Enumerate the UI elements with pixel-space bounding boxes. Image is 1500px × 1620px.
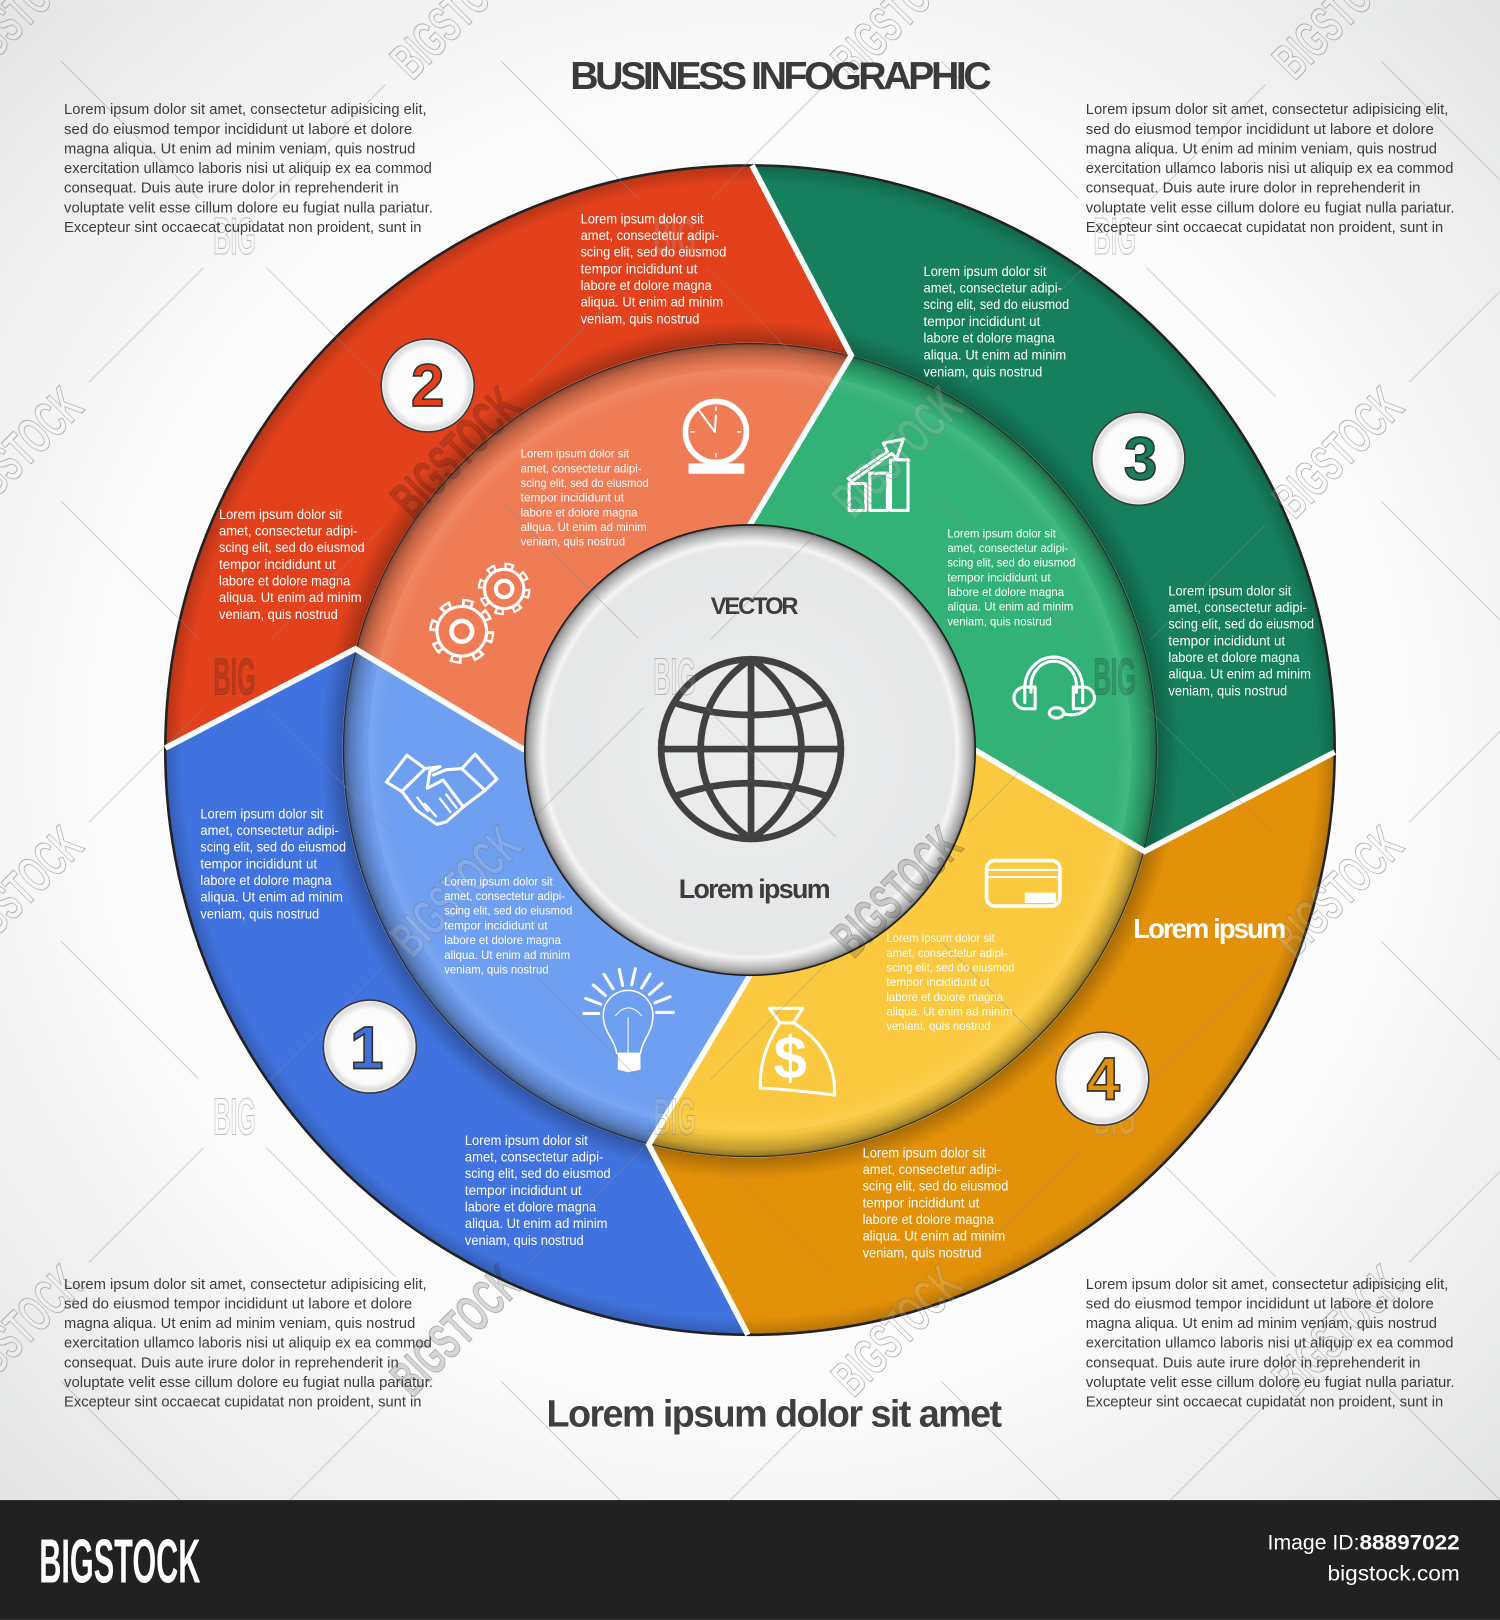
- text block: bottom right: consequat. Duis aute irure dolor in reprehenderit in: [1086, 1355, 1420, 1371]
- subtitle: Lorem ipsum dolor sit amet: [546, 1393, 1003, 1435]
- middle text: coral: veniam, quis nostrud: [521, 535, 625, 549]
- icon: money bag: [760, 1008, 835, 1095]
- badge: 3: 3: [1124, 425, 1157, 492]
- outer text: red top: aliqua. Ut enim ad minim: [581, 295, 723, 310]
- outer text: red left: labore et dolore magna: [219, 574, 351, 589]
- middle text: coral: [521, 447, 649, 549]
- centre label: Lorem ipsum: Lorem ipsum: [679, 874, 831, 904]
- icon: credit card: [987, 861, 1060, 906]
- text block: bottom right: Lorem ipsum dolor sit amet, consectetur adipisicing elit,: [1086, 1277, 1448, 1293]
- outer text: blue bottom: scing elit, sed do eiusmod: [465, 1166, 611, 1181]
- text block: bottom right: [1086, 1277, 1455, 1411]
- outer text: blue bottom: tempor incididunt ut: [465, 1183, 582, 1198]
- outer text: red top: amet, consectetur adipi-: [581, 228, 719, 243]
- middle text: blue: aliqua. Ut enim ad minim: [444, 948, 570, 962]
- white separators: [165, 165, 1335, 1335]
- middle text: yellow: [886, 931, 1014, 1033]
- watermark: BIGSTOCK: BIGSTOCK: [379, 815, 531, 967]
- text block: bottom right: sed do eiusmod tempor incididunt ut labore et dolore: [1086, 1296, 1434, 1312]
- outer text: red top: scing elit, sed do eiusmod: [581, 244, 726, 259]
- middle text: blue: tempor incididunt ut: [444, 918, 548, 932]
- outer text: red left: amet, consectetur adipi-: [219, 523, 357, 538]
- outer text: red left: scing elit, sed do eiusmod: [219, 540, 365, 555]
- outer text: orange bottom: amet, consectetur adipi-: [863, 1162, 1001, 1177]
- outer text: green right: Lorem ipsum dolor sit: [1168, 583, 1292, 598]
- text block: bottom left: Excepteur sint occaecat cupidatat non proident, sunt in: [64, 1395, 421, 1411]
- outer text: red left: tempor incididunt ut: [219, 557, 336, 572]
- watermark: BIG: BIG: [653, 207, 696, 265]
- outer segment: green: [752, 165, 1335, 851]
- outer text: red top: [581, 211, 726, 327]
- outer text: red left: [219, 507, 365, 622]
- text block: bottom right: Excepteur sint occaecat cupidatat non proident, sunt in: [1086, 1395, 1443, 1411]
- text block: bottom left: [64, 1277, 433, 1411]
- watermark: BIG: BIG: [213, 647, 256, 705]
- middle text: coral: scing elit, sed do eiusmod: [521, 476, 649, 490]
- icon: money bag: $: [774, 1025, 807, 1092]
- text block: top right: sed do eiusmod tempor incididunt ut labore et dolore: [1086, 122, 1434, 138]
- outer text: orange bottom: labore et dolore magna: [863, 1212, 994, 1227]
- middle text: green: Lorem ipsum dolor sit: [947, 526, 1056, 540]
- outer ring: [165, 165, 1335, 1335]
- outer text: blue left: tempor incididunt ut: [200, 857, 317, 872]
- middle text: blue: [444, 874, 572, 976]
- outer text: blue left: amet, consectetur adipi-: [200, 823, 339, 838]
- badge: 1: 1: [350, 1014, 383, 1081]
- title: BUSINESS INFOGRAPHIC: [570, 54, 992, 98]
- middle segment: green: [750, 355, 1157, 851]
- middle text: yellow: labore et dolore magna: [886, 990, 1003, 1004]
- outer text: green top: tempor incididunt ut: [924, 314, 1041, 329]
- outer segment: blue: [165, 649, 748, 1335]
- text block: top right: Lorem ipsum dolor sit amet, consectetur adipisicing elit,: [1086, 102, 1448, 118]
- outer text: green right: labore et dolore magna: [1168, 650, 1300, 665]
- watermark: BIGSTOCK: BIGSTOCK: [1261, 815, 1414, 967]
- watermark: BIG: BIG: [213, 1087, 256, 1145]
- text block: top left: Lorem ipsum dolor sit amet, consectetur adipisicing elit,: [64, 102, 427, 118]
- outer text: green top: [924, 264, 1069, 379]
- outer text: green top: veniam, quis nostrud: [924, 364, 1042, 379]
- middle text: yellow: aliqua. Ut enim ad minim: [886, 1005, 1012, 1019]
- text block: bottom left: consequat. Duis aute irure dolor in reprehenderit in: [64, 1355, 399, 1371]
- badge: 1: [323, 1000, 416, 1093]
- text block: top right: [1086, 102, 1455, 236]
- outer text: orange bottom: [863, 1145, 1008, 1261]
- watermark: BIGSTOCK: BIGSTOCK: [820, 1254, 972, 1406]
- middle text: yellow: tempor incididunt ut: [886, 975, 990, 989]
- middle segment: coral: [355, 343, 851, 750]
- text block: top left: voluptate velit esse cillum dolore eu fugiat nulla pariatur.: [64, 200, 433, 216]
- outer text: green top: scing elit, sed do eiusmod: [924, 297, 1069, 312]
- outer text: orange bottom: tempor incididunt ut: [863, 1195, 980, 1210]
- centre disc: [525, 525, 975, 975]
- icon: headset: [1014, 657, 1095, 718]
- icon: handshake: [386, 754, 497, 824]
- outer text: green right: amet, consectetur adipi-: [1168, 600, 1307, 615]
- watermark: BIGSTOCK: BIGSTOCK: [820, 376, 972, 528]
- outer text: blue left: Lorem ipsum dolor sit: [200, 806, 324, 821]
- outer text: orange bottom: scing elit, sed do eiusmod: [863, 1178, 1008, 1193]
- text block: top left: [64, 102, 433, 236]
- badge: 4: [1056, 1032, 1149, 1125]
- middle text: yellow: scing elit, sed do eiusmod: [886, 961, 1014, 975]
- text: BIG: [1093, 207, 1136, 265]
- watermark: BIGSTOCK: BIGSTOCK: [1261, 1254, 1414, 1406]
- outer text: blue bottom: aliqua. Ut enim ad minim: [465, 1216, 607, 1231]
- text block: top left: Excepteur sint occaecat cupidatat non proident, sunt in: [64, 220, 421, 236]
- middle text: yellow: veniam, quis nostrud: [886, 1019, 991, 1033]
- outer text: blue bottom: labore et dolore magna: [465, 1200, 597, 1215]
- outer text: green right: tempor incididunt ut: [1168, 633, 1285, 648]
- middle text: blue: amet, consectetur adipi-: [444, 889, 565, 903]
- text: BIG: [1093, 647, 1136, 705]
- footer bar: [0, 1500, 1500, 1620]
- centre label: VECTOR: VECTOR: [711, 593, 799, 620]
- outer text: red top: labore et dolore magna: [581, 278, 712, 293]
- middle segment: yellow: [649, 750, 1145, 1158]
- icon: bar chart with arrow: [848, 439, 908, 510]
- watermark: BIG: BIG: [213, 207, 256, 265]
- outer text: green right: [1168, 583, 1314, 699]
- outer text: green top: Lorem ipsum dolor sit: [924, 264, 1047, 279]
- text block: top right: voluptate velit esse cillum dolore eu fugiat nulla pariatur.: [1086, 200, 1455, 216]
- watermark: BIGSTOCK: BIGSTOCK: [820, 815, 972, 967]
- middle text: green: labore et dolore magna: [947, 585, 1064, 599]
- outer text: orange bottom: veniam, quis nostrud: [863, 1246, 981, 1261]
- footer bar: BIGSTOCK: [39, 1528, 201, 1597]
- watermark: BIG: [213, 207, 1136, 1145]
- middle text: green: aliqua. Ut enim ad minim: [947, 600, 1073, 614]
- watermark: BIG: BIG: [653, 1087, 696, 1145]
- footer site: bigstock.com: [1327, 1561, 1460, 1586]
- outer text: red top: veniam, quis nostrud: [581, 312, 699, 327]
- middle text: blue: scing elit, sed do eiusmod: [444, 904, 572, 918]
- outer text: green top: labore et dolore magna: [924, 331, 1055, 346]
- outer text: blue bottom: amet, consectetur adipi-: [465, 1149, 603, 1164]
- outer segment: red: [165, 165, 851, 748]
- middle text: green: amet, consectetur adipi-: [947, 541, 1068, 555]
- middle text: blue: veniam, quis nostrud: [444, 962, 549, 976]
- outer text: red top: tempor incididunt ut: [581, 262, 698, 277]
- middle text: coral: aliqua. Ut enim ad minim: [521, 520, 647, 534]
- watermark: BIGSTOCK: BIGSTOCK: [1261, 376, 1414, 528]
- icon: globe: [661, 659, 841, 839]
- outer text: green right: veniam, quis nostrud: [1168, 684, 1287, 699]
- outer segment: orange: [649, 752, 1335, 1335]
- footer image id: Image ID:: [1268, 1530, 1360, 1555]
- middle text: yellow: Lorem ipsum dolor sit: [886, 931, 996, 945]
- outer text: green top: amet, consectetur adipi-: [924, 281, 1062, 296]
- middle text: green: veniam, quis nostrud: [947, 614, 1052, 628]
- outer text: green right: scing elit, sed do eiusmod: [1168, 616, 1314, 631]
- outer text: blue bottom: Lorem ipsum dolor sit: [465, 1133, 588, 1148]
- middle ring: [343, 343, 1157, 1158]
- text block: bottom right: voluptate velit esse cillum dolore eu fugiat nulla pariatur.: [1086, 1375, 1455, 1391]
- middle text: yellow: amet, consectetur adipi-: [886, 946, 1007, 960]
- outer text: blue left: veniam, quis nostrud: [200, 907, 319, 922]
- middle text: coral: Lorem ipsum dolor sit: [521, 447, 630, 461]
- badge: 2: [381, 339, 474, 432]
- footer image number: 88897022: [1360, 1530, 1460, 1555]
- middle text: coral: labore et dolore magna: [521, 505, 638, 519]
- outer text: red left: aliqua. Ut enim ad minim: [219, 590, 362, 605]
- outer text: red left: Lorem ipsum dolor sit: [219, 507, 342, 522]
- watermark: BIG: BIG: [653, 647, 696, 705]
- badge: 2: 2: [411, 352, 444, 419]
- text block: top left: sed do eiusmod tempor incididunt ut labore et dolore: [64, 122, 412, 138]
- text block: top right: exercitation ullamco laboris nisi ut aliquip ex ea commod: [1086, 161, 1454, 177]
- text block: top left: exercitation ullamco laboris nisi ut aliquip ex ea commod: [64, 161, 432, 177]
- middle text: green: [947, 526, 1075, 628]
- text block: top right: consequat. Duis aute irure dolor in reprehenderit in: [1086, 181, 1420, 197]
- badge: 3: [1092, 412, 1185, 505]
- text block: bottom left: exercitation ullamco laboris nisi ut aliquip ex ea commod: [64, 1336, 432, 1352]
- middle text: coral: amet, consectetur adipi-: [521, 461, 642, 475]
- outer text: blue left: scing elit, sed do eiusmod: [200, 840, 346, 855]
- icon: light bulb: [584, 969, 673, 1072]
- text block: bottom left: magna aliqua. Ut enim ad minim veniam, quis nostrud: [64, 1316, 415, 1332]
- text block: top right: Excepteur sint occaecat cupidatat non proident, sunt in: [1086, 220, 1443, 236]
- middle text: blue: Lorem ipsum dolor sit: [444, 874, 553, 888]
- icon: gears: [433, 566, 527, 660]
- text block: bottom right: magna aliqua. Ut enim ad minim veniam, quis nostrud: [1086, 1316, 1437, 1332]
- middle text: green: tempor incididunt ut: [947, 570, 1051, 584]
- text block: bottom right: exercitation ullamco laboris nisi ut aliquip ex ea commod: [1086, 1336, 1454, 1352]
- outer text: orange bottom: Lorem ipsum dolor sit: [863, 1145, 986, 1160]
- outer text: blue left: labore et dolore magna: [200, 873, 332, 888]
- watermark: BIGSTOCK: BIGSTOCK: [379, 376, 531, 528]
- middle segment: blue: [343, 649, 750, 1145]
- outer text: red top: Lorem ipsum dolor sit: [581, 211, 704, 226]
- icon: clock: [685, 401, 746, 473]
- middle text: blue: labore et dolore magna: [444, 933, 561, 947]
- text: BIG: [1093, 1087, 1136, 1145]
- text block: bottom left: voluptate velit esse cillum dolore eu fugiat nulla pariatur.: [64, 1375, 433, 1391]
- text block: bottom left: sed do eiusmod tempor incididunt ut labore et dolore: [64, 1296, 412, 1312]
- middle text: green: scing elit, sed do eiusmod: [947, 556, 1075, 570]
- outer text: red left: veniam, quis nostrud: [219, 607, 338, 622]
- middle text: coral: tempor incididunt ut: [521, 491, 625, 505]
- watermark: BIGSTOCK: BIGSTOCK: [379, 1254, 531, 1406]
- text block: bottom left: Lorem ipsum dolor sit amet, consectetur adipisicing elit,: [64, 1277, 427, 1293]
- outer text: blue left: [200, 806, 346, 922]
- outer text: green top: aliqua. Ut enim ad minim: [924, 347, 1066, 362]
- outer text: blue bottom: veniam, quis nostrud: [465, 1233, 584, 1248]
- text block: top left: magna aliqua. Ut enim ad minim veniam, quis nostrud: [64, 141, 415, 157]
- orange segment label: Lorem ipsum: [1133, 913, 1286, 944]
- outer text: green right: aliqua. Ut enim ad minim: [1168, 666, 1311, 681]
- outer text: orange bottom: aliqua. Ut enim ad minim: [863, 1228, 1005, 1243]
- badge: 4: 4: [1087, 1045, 1120, 1112]
- text block: top right: magna aliqua. Ut enim ad minim veniam, quis nostrud: [1086, 141, 1437, 157]
- outer text: blue bottom: [465, 1133, 611, 1248]
- text block: top left: consequat. Duis aute irure dolor in reprehenderit in: [64, 181, 399, 197]
- outer text: blue left: aliqua. Ut enim ad minim: [200, 890, 343, 905]
